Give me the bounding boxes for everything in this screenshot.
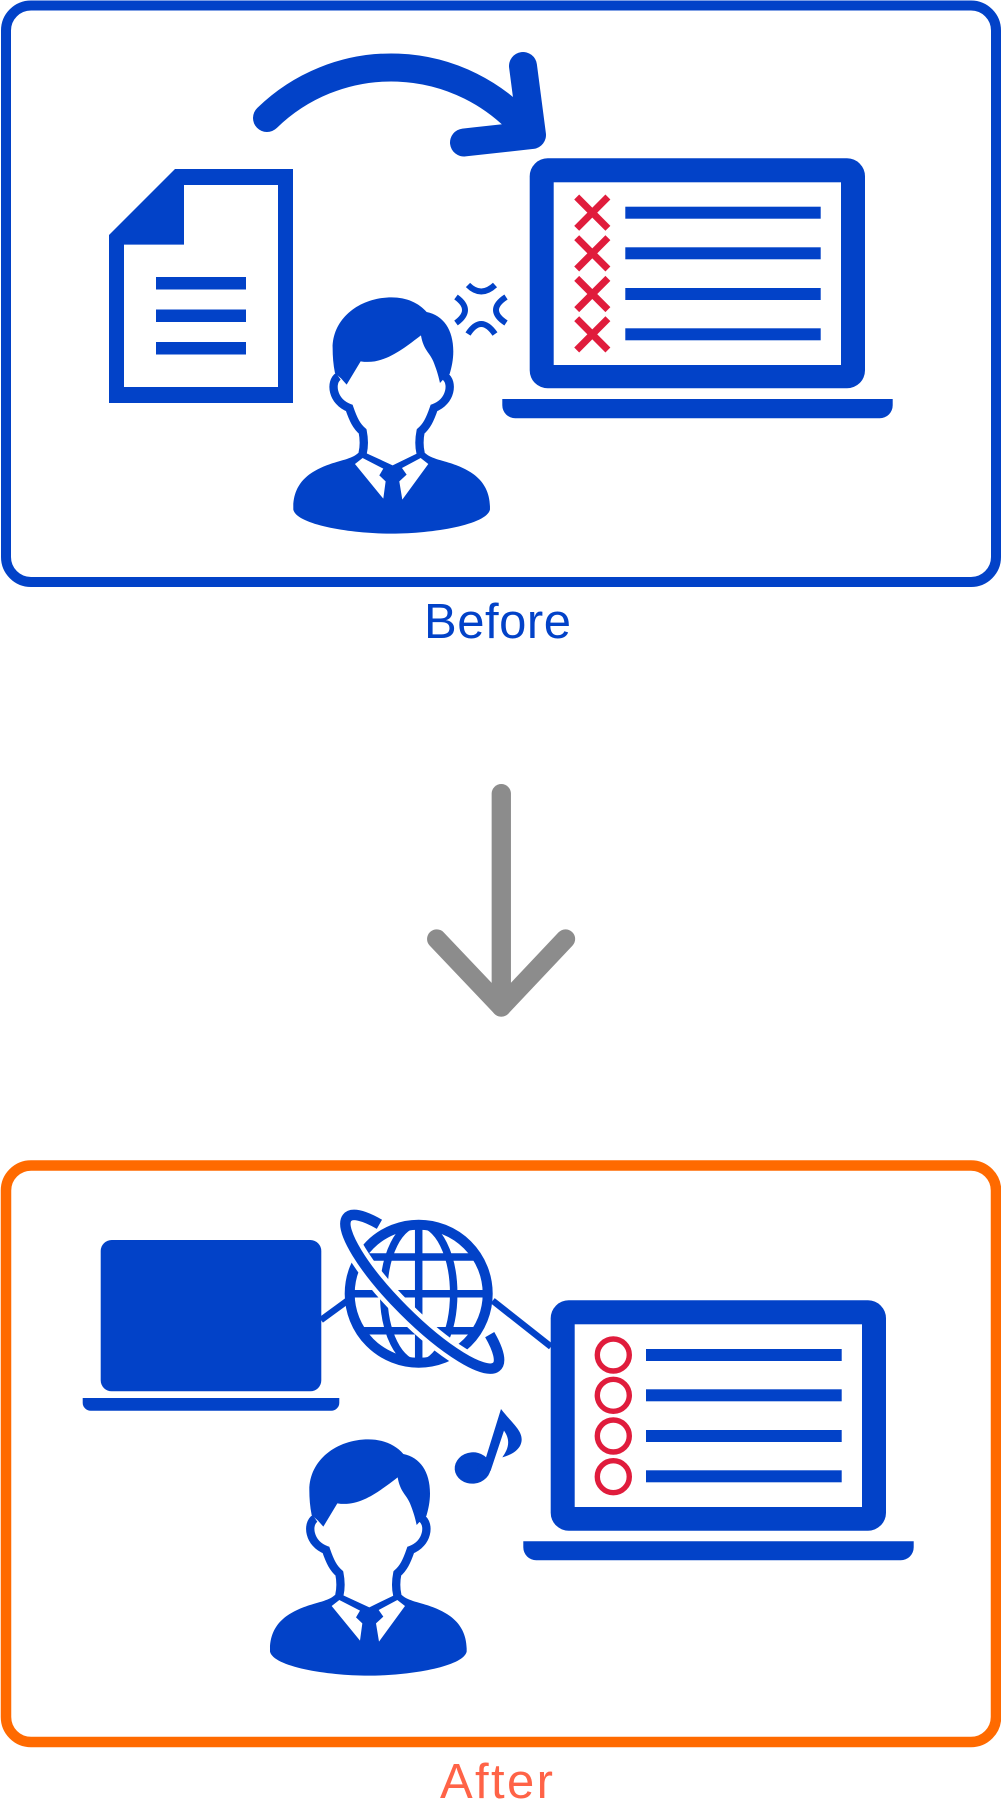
- icon: laptop with crossed list: [502, 158, 893, 418]
- icon: solid laptop: [83, 1240, 339, 1411]
- arrow: down: [437, 794, 566, 1007]
- panel: before: [6, 6, 996, 649]
- icon: annoyed businessman: [293, 297, 490, 534]
- panel frame: before: [6, 6, 996, 582]
- arrow: curved from document to laptop: [267, 66, 532, 142]
- icon: music note: [453, 1409, 522, 1485]
- icon: paper document: [109, 169, 293, 403]
- icon: happy businessman: [270, 1439, 467, 1676]
- icon: globe with orbit: [340, 1210, 504, 1374]
- label: Before: Before: [424, 595, 571, 649]
- connection lines between laptops and globe: [321, 1301, 551, 1347]
- panel frame: after: [6, 1166, 996, 1742]
- panel: after: [6, 1166, 996, 1804]
- icon: laptop with circled list: [523, 1300, 914, 1560]
- icon: anger mark: [456, 285, 506, 334]
